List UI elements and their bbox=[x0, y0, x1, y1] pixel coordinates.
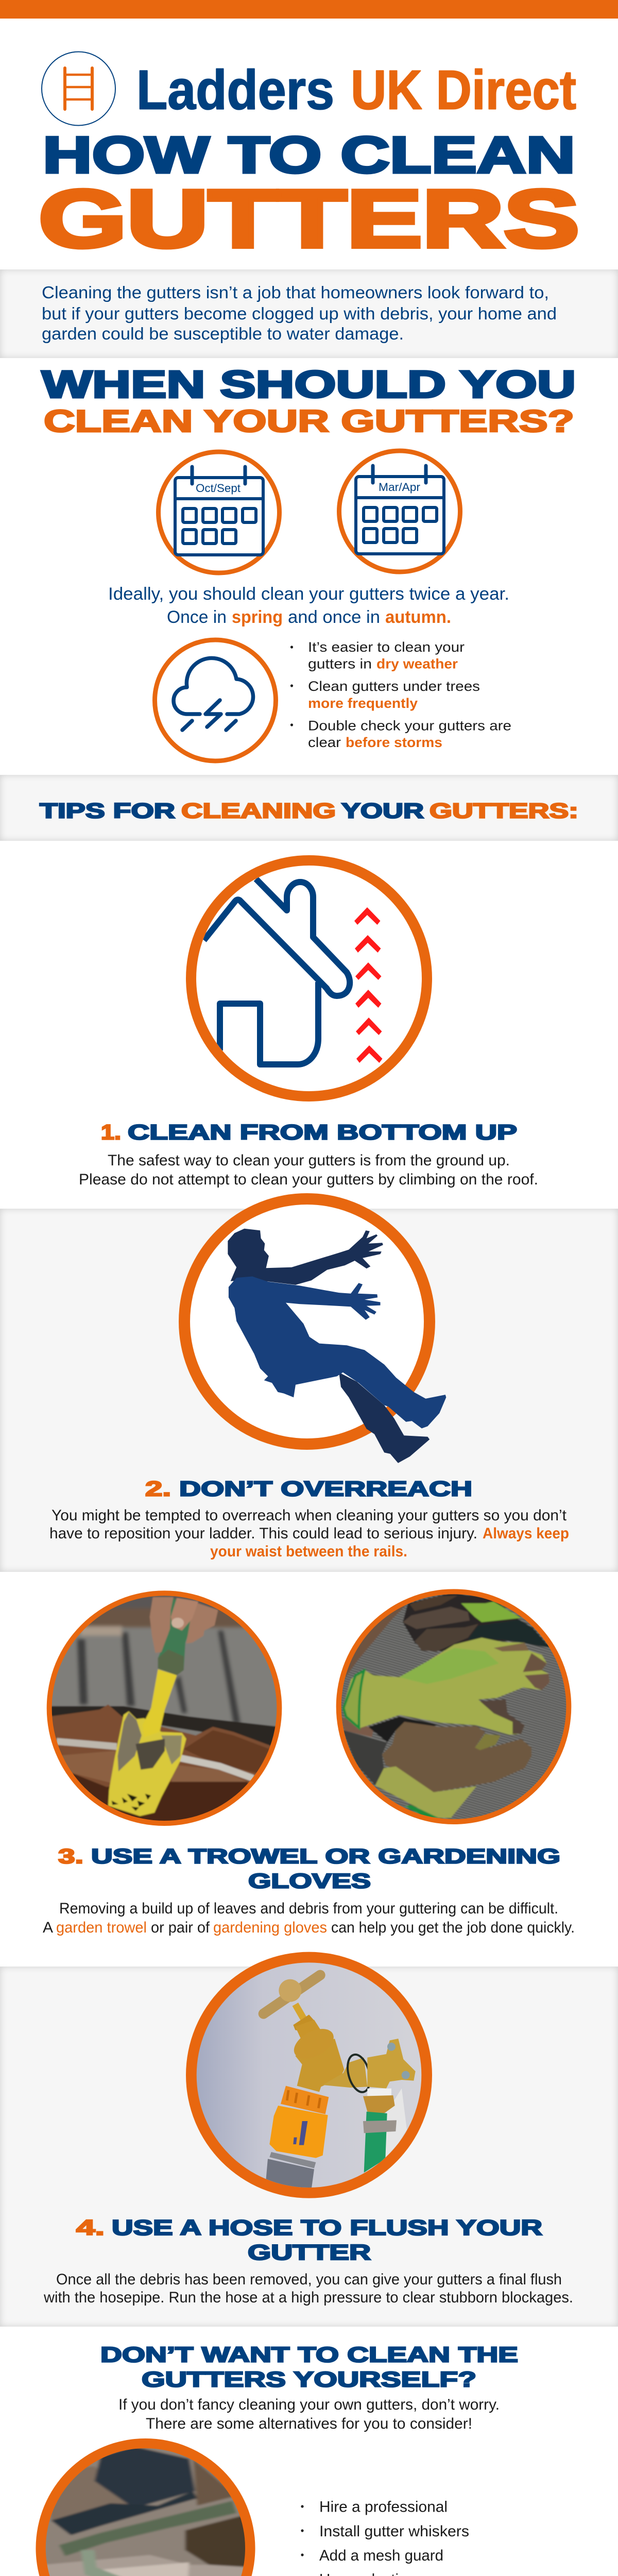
logo bbox=[42, 52, 576, 126]
weather bullet list: more frequently bbox=[308, 696, 418, 711]
panel: tip 2 background bbox=[0, 1209, 618, 1572]
alternatives text bbox=[118, 2396, 500, 2432]
panel: intro background bbox=[0, 269, 618, 358]
tip 2 text: You might be tempted to overreach when cleaning your gutters so you don’t bbox=[52, 1507, 567, 1524]
twice a year text bbox=[108, 584, 509, 627]
tip 3 text: garden trowel bbox=[56, 1919, 147, 1936]
logo text: Ladders bbox=[136, 59, 334, 121]
alternatives text: If you don’t fancy cleaning your own gutters, don’t worry. bbox=[118, 2396, 500, 2413]
tip 2 text: Always keep bbox=[483, 1525, 569, 1542]
intro text: but if your gutters become clogged up with debris, your home and bbox=[42, 304, 557, 323]
heading: tips: TIPS FOR bbox=[40, 799, 175, 822]
weather bullet list: It’s easier to clean your bbox=[308, 639, 465, 655]
icon: ladder logo bbox=[42, 52, 115, 126]
photo: garden trowel bbox=[47, 1590, 282, 1826]
tip 4 text: Once all the debris has been removed, you can give your gutters a final flush bbox=[56, 2271, 562, 2288]
photo: outdoor tap and hose bbox=[186, 1952, 432, 2198]
twice a year text: Ideally, you should clean your gutters twice a year. bbox=[108, 584, 509, 604]
logo text bbox=[136, 59, 576, 121]
twice a year text: Once in bbox=[167, 607, 227, 627]
tip 3 heading: GLOVES bbox=[248, 1870, 371, 1893]
back silhouette bbox=[228, 1229, 430, 1463]
logo text: UK Direct bbox=[351, 59, 576, 121]
title: GUTTERS bbox=[39, 174, 579, 264]
panel: tips heading background bbox=[0, 775, 618, 841]
weather bullet list: gutters in bbox=[308, 656, 372, 672]
heading: don't want to clean: GUTTERS YOURSELF? bbox=[142, 2367, 476, 2392]
tip 4 text bbox=[43, 2271, 573, 2306]
intro text bbox=[42, 283, 557, 343]
icon: falling man bbox=[184, 1199, 446, 1463]
heading: tips bbox=[40, 799, 578, 822]
tip 3 text: or pair of bbox=[151, 1919, 210, 1936]
panel: tip 4 background bbox=[0, 1967, 618, 2327]
tip 1 text: The safest way to clean your gutters is from the ground up. bbox=[108, 1152, 510, 1169]
tip 3 text: can help you get the job done quickly. bbox=[331, 1919, 575, 1936]
alternatives text: There are some alternatives for you to consider! bbox=[146, 2415, 472, 2432]
twice a year text: spring bbox=[232, 607, 283, 627]
twice a year text: and once in bbox=[288, 607, 380, 627]
icon: calendar autumn: Oct/Sept bbox=[196, 482, 241, 495]
heading: tips: CLEANING bbox=[181, 799, 336, 822]
weather bullet list: Double check your gutters are bbox=[308, 718, 511, 734]
tip 3 text: Removing a build up of leaves and debris from your guttering can be difficult. bbox=[59, 1900, 558, 1917]
heading: tips: GUTTERS: bbox=[430, 799, 578, 822]
icon: calendar spring: Mar/Apr bbox=[379, 481, 420, 494]
icon: calendar spring bbox=[339, 451, 460, 572]
tip 1 text: Please do not attempt to clean your gutters by climbing on the roof. bbox=[79, 1171, 538, 1188]
tip 2 text: have to reposition your ladder. This could lead to serious injury. bbox=[49, 1525, 477, 1542]
tip 4 heading bbox=[76, 2215, 542, 2264]
tip 2 heading bbox=[145, 1477, 472, 1500]
intro text: Cleaning the gutters isn’t a job that homeowners look forward to, bbox=[42, 283, 549, 302]
icon: red up chevrons bbox=[354, 907, 382, 1063]
photo: gardening gloves bbox=[336, 1589, 571, 1824]
heading: tips: YOUR bbox=[341, 799, 424, 822]
tip 1 heading bbox=[101, 1120, 517, 1144]
tip 3 heading: 3. bbox=[58, 1845, 83, 1868]
twice a year text: autumn. bbox=[385, 607, 451, 627]
title bbox=[39, 126, 579, 264]
alternatives bullet list: Hire a professional bbox=[319, 2499, 448, 2515]
tip 3 heading bbox=[58, 1845, 560, 1893]
photo: blocked gutter bbox=[36, 2438, 255, 2576]
intro text: garden could be susceptible to water damage. bbox=[42, 324, 404, 343]
alternatives bullet list bbox=[301, 2499, 469, 2576]
alternatives bullet list: Install gutter whiskers bbox=[319, 2523, 469, 2540]
front silhouette bbox=[229, 1277, 446, 1428]
weather bullet list: Clean gutters under trees bbox=[308, 679, 480, 694]
title: HOW TO CLEAN bbox=[43, 126, 575, 184]
tip 3 text: A bbox=[43, 1919, 53, 1936]
tip 2 text bbox=[49, 1507, 569, 1560]
weather bullet list: before storms bbox=[346, 735, 442, 750]
tip 1 heading: CLEAN FROM BOTTOM UP bbox=[128, 1120, 517, 1144]
tip 2 heading: 2. bbox=[145, 1477, 171, 1500]
tip 3 heading: USE A TROWEL OR GARDENING bbox=[91, 1845, 560, 1868]
tip 2 text: your waist between the rails. bbox=[210, 1543, 407, 1560]
tip 3 text bbox=[43, 1900, 575, 1936]
alternatives bullet list: Add a mesh guard bbox=[319, 2547, 443, 2564]
tip 4 heading: 4. bbox=[76, 2215, 105, 2240]
weather bullet list: clear bbox=[308, 735, 341, 750]
heading: don't want to clean: DON’T WANT TO CLEAN THE bbox=[100, 2342, 518, 2367]
weather bullet list: dry weather bbox=[376, 656, 458, 672]
tip 4 heading: USE A HOSE TO FLUSH YOUR bbox=[112, 2215, 542, 2240]
icon: storm cloud bbox=[154, 640, 276, 761]
tip 1 text bbox=[79, 1152, 538, 1188]
weather bullet list bbox=[290, 639, 511, 750]
top orange bar bbox=[0, 0, 618, 19]
heading: when should you clean bbox=[42, 363, 576, 438]
icon: house with chevrons bbox=[191, 860, 427, 1096]
tip 1 heading: 1. bbox=[101, 1120, 121, 1144]
tip 2 heading: DON’T OVERREACH bbox=[179, 1477, 472, 1500]
heading: when should you clean: CLEAN YOUR GUTTERS? bbox=[44, 404, 574, 438]
tip 3 text: gardening gloves bbox=[213, 1919, 327, 1936]
tip 4 heading: GUTTER bbox=[248, 2240, 371, 2264]
heading: don't want to clean bbox=[100, 2342, 518, 2392]
icon: calendar autumn bbox=[159, 452, 279, 573]
heading: when should you clean: WHEN SHOULD YOU bbox=[42, 363, 576, 406]
tip 4 text: with the hosepipe. Run the hose at a high pressure to clear stubborn blockages. bbox=[43, 2289, 573, 2306]
